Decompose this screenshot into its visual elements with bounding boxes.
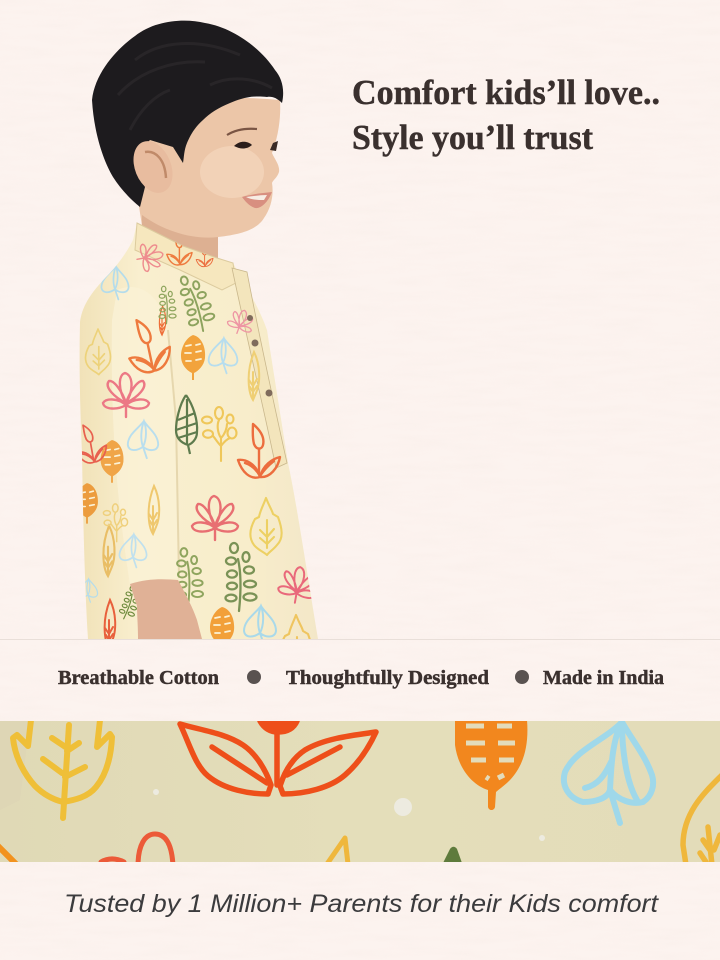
placket (232, 268, 287, 468)
collar (135, 223, 236, 290)
orange filled leaf (455, 720, 527, 810)
blue leaf (564, 722, 653, 823)
buttons (247, 315, 272, 396)
hand (130, 579, 202, 639)
fabric flecks (153, 789, 545, 841)
sleeve fold shading (112, 287, 178, 585)
yellow leaf (13, 720, 112, 818)
hair (92, 21, 283, 207)
heading: Style you’ll trust (352, 118, 593, 157)
photo: smiling boy in leaf-print kurta (72, 21, 320, 672)
bottom partial leaves (0, 834, 462, 866)
leaf prints (82, 242, 312, 639)
yellow leaf right (683, 775, 720, 865)
ear (126, 135, 180, 199)
orange-red tulip (180, 721, 376, 794)
feature row: Thoughtfully Designed (286, 667, 489, 689)
neck and face (138, 98, 280, 260)
kurta body (80, 223, 318, 639)
smile (242, 192, 272, 208)
heading: Comfort kids’ll love.. (352, 73, 660, 112)
heading (352, 73, 660, 157)
neck shadow (142, 215, 218, 260)
cheek highlight (200, 146, 264, 198)
hair sheen (118, 44, 272, 130)
trust line: Tusted by 1 Million+ Parents for their Kids comfort (64, 890, 659, 918)
feature row: Made in India (543, 667, 664, 689)
fabric close-up strip (0, 720, 720, 866)
feature row: Breathable Cotton (58, 667, 219, 689)
feature row (58, 667, 664, 689)
eye and brow (227, 129, 278, 151)
